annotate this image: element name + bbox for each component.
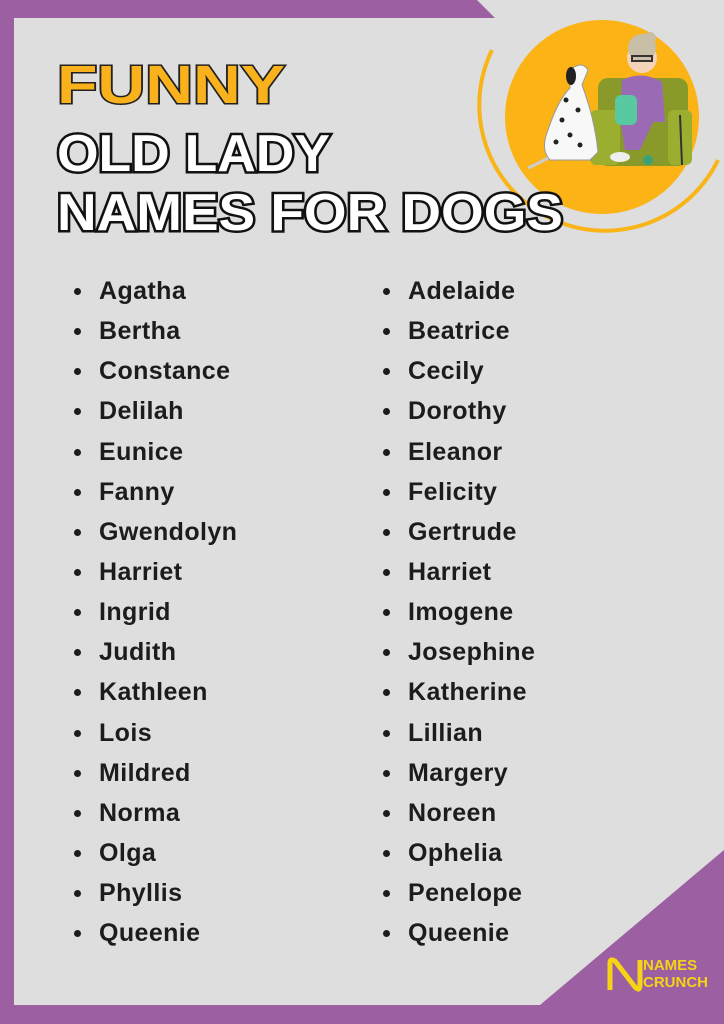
chair bbox=[598, 78, 688, 166]
list: left column: Agatha bbox=[99, 277, 186, 305]
logo: names crunch: CRUNCH bbox=[643, 974, 708, 991]
list: right column: Cecily bbox=[408, 357, 484, 385]
list: right column: Gertrude bbox=[408, 518, 517, 546]
title: NAMES FOR DOGS bbox=[57, 184, 563, 242]
list: left column bbox=[74, 277, 237, 947]
dog bbox=[544, 65, 598, 160]
logo: names crunch: NAMES bbox=[643, 957, 697, 974]
list: right column: Felicity bbox=[408, 478, 497, 506]
list: left column: Norma bbox=[99, 799, 180, 827]
list: left column: Gwendolyn bbox=[99, 518, 237, 546]
list: left column: Ingrid bbox=[99, 598, 171, 626]
list: left column: Queenie bbox=[99, 919, 200, 947]
list: right column bbox=[383, 277, 535, 947]
list: right column: Queenie bbox=[408, 919, 509, 947]
list: right column: Penelope bbox=[408, 879, 522, 907]
illustration: yellow circle with old lady and dog bbox=[477, 20, 720, 233]
list: left column: Fanny bbox=[99, 478, 175, 506]
list: left column: Constance bbox=[99, 357, 230, 385]
title: OLD LADY bbox=[57, 125, 330, 183]
list: right column: Lillian bbox=[408, 719, 483, 747]
lady bbox=[627, 43, 657, 73]
list: left column: Delilah bbox=[99, 397, 184, 425]
logo: names crunch bbox=[608, 957, 708, 992]
list: left column: Olga bbox=[99, 839, 156, 867]
list: right column: Dorothy bbox=[408, 397, 507, 425]
list: right column: Harriet bbox=[408, 558, 491, 586]
list: right column: Eleanor bbox=[408, 438, 502, 466]
list: right column: Margery bbox=[408, 759, 508, 787]
list: left column: Eunice bbox=[99, 438, 183, 466]
list: right column: Ophelia bbox=[408, 839, 502, 867]
list: right column: Noreen bbox=[408, 799, 497, 827]
list: right column: Adelaide bbox=[408, 277, 515, 305]
title bbox=[56, 55, 564, 242]
list: left column: Phyllis bbox=[99, 879, 182, 907]
list: left column: Lois bbox=[99, 719, 152, 747]
list: left column: Judith bbox=[99, 638, 176, 666]
list: right column: Imogene bbox=[408, 598, 514, 626]
list: left column: Bertha bbox=[99, 317, 181, 345]
list: left column: Mildred bbox=[99, 759, 191, 787]
list: left column: Harriet bbox=[99, 558, 182, 586]
list: left column: Kathleen bbox=[99, 678, 208, 706]
list: right column: Katherine bbox=[408, 678, 527, 706]
list: right column: Beatrice bbox=[408, 317, 510, 345]
list: right column: Josephine bbox=[408, 638, 535, 666]
title: FUNNY bbox=[57, 55, 285, 115]
